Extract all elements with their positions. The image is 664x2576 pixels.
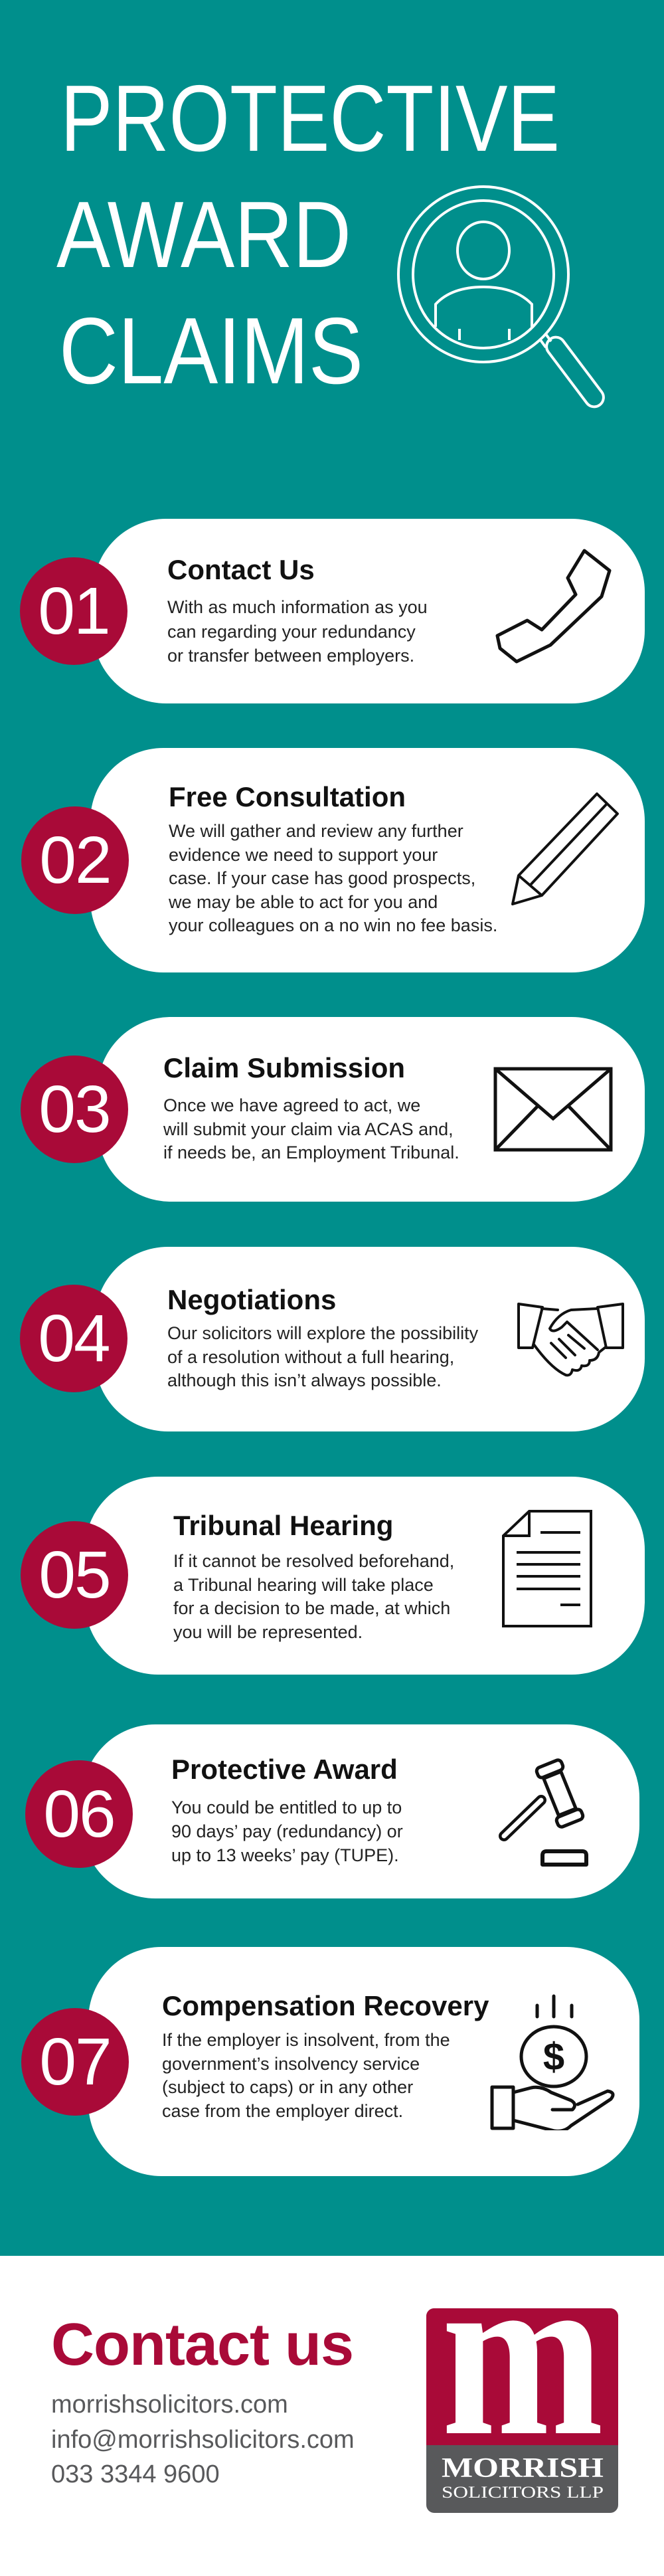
card 06: You could be entitled to up to <box>171 1797 402 1817</box>
logo: SOLICITORS LLP <box>442 2484 604 2502</box>
card 04: of a resolution without a full hearing, <box>167 1347 454 1367</box>
card 05: a Tribunal hearing will take place <box>173 1575 434 1595</box>
card 03: will submit your claim via ACAS and, <box>163 1119 454 1139</box>
card 07: 07 <box>39 2025 111 2099</box>
card 03: 03 <box>39 1072 110 1147</box>
card 05 <box>21 1477 645 1675</box>
title: AWARD <box>56 182 351 288</box>
card 06: 90 days’ pay (redundancy) or <box>171 1821 403 1841</box>
card 03 <box>21 1017 645 1202</box>
card 05: for a decision to be made, at which <box>173 1598 450 1618</box>
logo: MORRISH <box>442 2453 604 2484</box>
footer: contact us <box>51 2312 355 2488</box>
icon: magnifier with person <box>397 185 605 408</box>
card 02: we may be able to act for you and <box>169 891 438 911</box>
card 01 <box>20 519 645 703</box>
card 03: Claim Submission <box>163 1052 405 1083</box>
card 02: We will gather and review any further <box>169 821 463 841</box>
card 07: case from the employer direct. <box>162 2101 403 2121</box>
card 02 <box>21 748 645 972</box>
card 05: 05 <box>39 1538 110 1612</box>
card 06: up to 13 weeks’ pay (TUPE). <box>171 1845 399 1865</box>
card 01: can regarding your redundancy <box>167 622 416 642</box>
card 04: although this isn’t always possible. <box>167 1370 442 1390</box>
card 02: evidence we need to support your <box>169 845 438 865</box>
title: PROTECTIVE <box>60 66 560 171</box>
card 07: government’s insolvency service <box>162 2054 420 2074</box>
card 07: Compensation Recovery <box>162 1990 489 2021</box>
card 07: (subject to caps) or in any other <box>162 2077 413 2097</box>
card 03: Once we have agreed to act, we <box>163 1095 420 1115</box>
card 03: if needs be, an Employment Tribunal. <box>163 1143 459 1162</box>
card 01: or transfer between employers. <box>167 646 414 666</box>
title: CLAIMS <box>59 298 363 404</box>
card 07: If the employer is insolvent, from the <box>162 2030 450 2050</box>
card 01: With as much information as you <box>167 597 428 617</box>
footer: contact us: morrishsolicitors.com <box>51 2391 288 2419</box>
card 06 <box>25 1724 639 1898</box>
card 02: case. If your case has good prospects, <box>169 868 475 888</box>
card 04: Our solicitors will explore the possibility <box>167 1323 478 1343</box>
card 04: Negotiations <box>167 1284 336 1315</box>
card 01: 01 <box>38 574 110 648</box>
card 02: Free Consultation <box>169 781 406 812</box>
footer: contact us: info@morrishsolicitors.com <box>51 2426 355 2454</box>
card 02: 02 <box>39 823 111 897</box>
card 04: 04 <box>38 1301 110 1376</box>
card 01: Contact Us <box>167 554 315 585</box>
card 06: Protective Award <box>171 1754 398 1785</box>
card 05: you will be represented. <box>173 1622 363 1642</box>
card 04 <box>20 1247 645 1431</box>
card 05: Tribunal Hearing <box>173 1510 393 1541</box>
card 07: $ <box>543 2035 564 2078</box>
footer: contact us: Contact us <box>51 2312 353 2378</box>
footer: contact us: 033 3344 9600 <box>51 2460 220 2488</box>
title <box>56 66 560 404</box>
card 05: If it cannot be resolved beforehand, <box>173 1551 454 1571</box>
card 02: your colleagues on a no win no fee basis. <box>169 915 497 935</box>
card 07 <box>21 1947 639 2176</box>
card 06: 06 <box>43 1777 115 1851</box>
